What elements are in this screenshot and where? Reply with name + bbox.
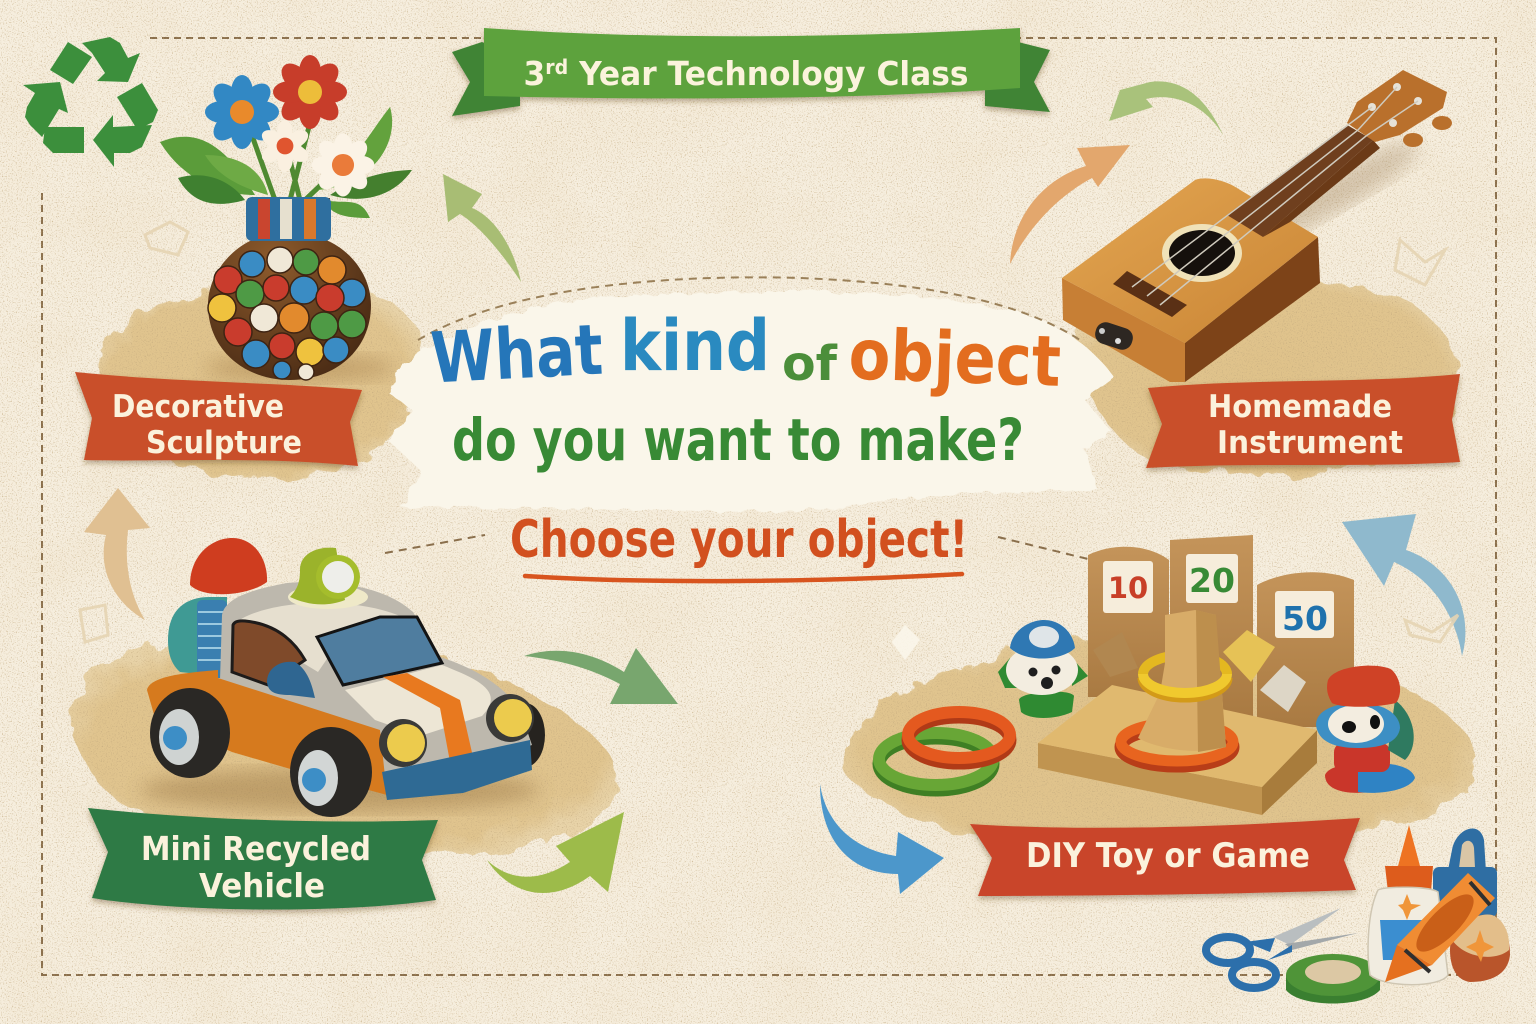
orange crayon bbox=[1385, 873, 1495, 982]
sand patch: bottom right bbox=[841, 640, 1475, 854]
label: Decorative Sculpture: Sculpture bbox=[146, 425, 302, 461]
arrow: green bottom left bbox=[524, 648, 678, 704]
object: ring toss game bbox=[879, 535, 1415, 815]
dashed arc above the paper bbox=[418, 277, 1080, 340]
hood stripe bbox=[383, 673, 473, 762]
label: DIY Toy or Game bbox=[970, 818, 1360, 896]
sand patch: top left bbox=[99, 282, 421, 479]
motion arrows bbox=[84, 81, 1465, 894]
side window bbox=[232, 621, 305, 685]
box top face bbox=[1062, 178, 1318, 343]
bridge bbox=[1113, 271, 1187, 317]
orange lower body bbox=[147, 670, 387, 795]
banner title: Year Technology Class bbox=[568, 54, 968, 93]
arrow: blue bottom right bbox=[820, 784, 944, 894]
sand patch: bottom left bbox=[71, 635, 620, 852]
centre torn paper bbox=[388, 291, 1115, 512]
main title: do you want to make? bbox=[452, 406, 1024, 474]
object: box ukulele bbox=[1062, 70, 1452, 382]
sand patch: top right bbox=[1074, 277, 1457, 475]
label: Decorative Sculpture: Decorative bbox=[112, 389, 284, 425]
arrow: lime bottom bbox=[487, 812, 624, 893]
score card 20: 20 bbox=[1189, 561, 1235, 600]
blue clip bbox=[1433, 829, 1497, 917]
score card 10: 10 bbox=[1108, 571, 1148, 605]
object: flower vase bbox=[160, 55, 412, 382]
car body bbox=[220, 582, 532, 795]
score card 20 bbox=[1170, 535, 1253, 717]
sound hole bbox=[1162, 224, 1242, 282]
label: Homemade Instrument: Instrument bbox=[1217, 425, 1403, 461]
main title: What bbox=[429, 309, 605, 399]
vase body bbox=[208, 198, 371, 380]
bumper bbox=[382, 740, 532, 800]
arrow: green top right bbox=[1109, 81, 1223, 135]
loose rings bbox=[879, 712, 1010, 790]
strings bbox=[1132, 87, 1418, 305]
score card 10 bbox=[1088, 547, 1169, 697]
far wheel bbox=[505, 703, 545, 767]
peg bbox=[1138, 610, 1226, 752]
roof light bbox=[288, 548, 368, 609]
flowers bbox=[205, 75, 279, 149]
yellow ring back bbox=[1143, 655, 1227, 674]
box left face bbox=[1062, 278, 1185, 382]
subtitle: Choose your object! bbox=[510, 510, 968, 570]
label: Mini Recycled Vehicle bbox=[88, 808, 438, 910]
roof highlight bbox=[233, 603, 412, 672]
cardboard decorations bbox=[1093, 632, 1138, 677]
object: recycled car bbox=[140, 538, 545, 817]
main title: of bbox=[782, 336, 838, 392]
leaves and stems bbox=[160, 107, 412, 218]
scissors bbox=[1206, 908, 1358, 988]
glue bottle bbox=[1368, 825, 1448, 985]
main title: object bbox=[847, 313, 1062, 403]
red dome bbox=[190, 538, 267, 594]
headlights bbox=[379, 694, 534, 767]
yellow ring front bbox=[1143, 674, 1227, 697]
hood bbox=[345, 665, 491, 736]
bottle cap mosaic bbox=[208, 247, 366, 380]
arrow: orange top right bbox=[1010, 145, 1130, 264]
tape ring bbox=[1286, 954, 1380, 1004]
neck underside bbox=[1263, 140, 1380, 237]
base side faces bbox=[1038, 743, 1262, 815]
mirror bbox=[267, 662, 315, 698]
tuning pegs bbox=[1368, 83, 1452, 147]
fretboard bbox=[1227, 125, 1373, 237]
jack bbox=[1093, 320, 1135, 352]
base board bbox=[1038, 685, 1317, 787]
label: Homemade Instrument: Homemade bbox=[1208, 389, 1392, 425]
banner title: rd bbox=[545, 55, 568, 79]
main title: kind bbox=[620, 305, 770, 387]
label: Decorative Sculpture bbox=[75, 372, 362, 466]
base ring bbox=[1121, 723, 1233, 766]
arrow: green top left bbox=[443, 174, 521, 282]
box right face bbox=[1185, 237, 1320, 382]
score card 50: 50 bbox=[1282, 599, 1328, 638]
mushroom character bbox=[998, 620, 1088, 718]
tan roll bbox=[1450, 914, 1510, 982]
robot character bbox=[1316, 666, 1415, 793]
faint doodle icons bbox=[80, 222, 1458, 660]
label: Mini Recycled Vehicle: Mini Recycled bbox=[141, 829, 371, 868]
top banner bbox=[452, 28, 1050, 116]
headstock bbox=[1347, 70, 1447, 142]
banner title: 3 bbox=[524, 54, 546, 93]
label: DIY Toy or Game: DIY Toy or Game bbox=[1026, 836, 1310, 876]
main title bbox=[429, 305, 1062, 474]
subtitle bbox=[385, 510, 1092, 581]
wheels bbox=[150, 688, 372, 817]
recycling icon bbox=[23, 37, 158, 167]
score card 50 bbox=[1257, 572, 1354, 727]
arrow: tan left bbox=[84, 488, 150, 620]
label: Mini Recycled Vehicle: Vehicle bbox=[199, 866, 325, 905]
rear drum bbox=[168, 597, 227, 678]
windshield bbox=[317, 617, 442, 685]
craft tools bbox=[1206, 825, 1510, 1004]
label: Homemade Instrument bbox=[1146, 374, 1460, 468]
arrow: light blue right bbox=[1342, 514, 1465, 656]
